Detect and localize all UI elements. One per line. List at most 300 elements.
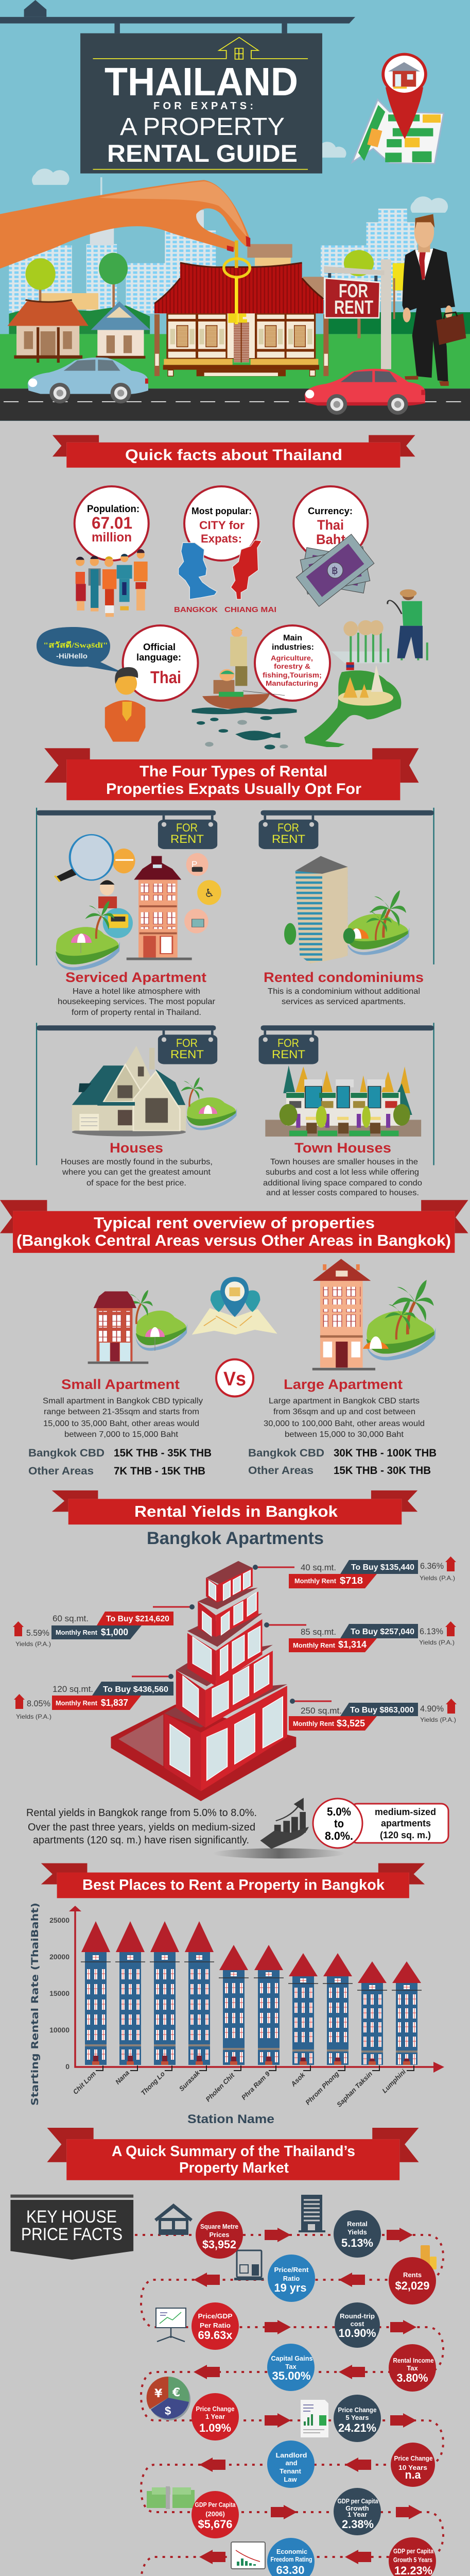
x axis title: Station Name xyxy=(187,2112,274,2126)
road xyxy=(0,388,470,421)
node: rental yields: Yields xyxy=(347,2228,367,2236)
node: rental yields: 5.13% xyxy=(341,2236,373,2249)
banner: quick summary: Property Market xyxy=(179,2160,289,2176)
illustration: small apartment building xyxy=(88,1290,187,1364)
fact: currency: Thai xyxy=(317,517,344,533)
callout: 60 sq.mt.: $1,000 xyxy=(101,1627,128,1637)
section: best places xyxy=(29,1863,444,2126)
heading and description: where you can get the greatest amount xyxy=(62,1168,211,1177)
fact: most popular city: BANGKOK xyxy=(174,605,218,614)
callout: 250 sq.mt.: To Buy $863,000 xyxy=(350,1706,414,1715)
station labels: Lumphini xyxy=(380,2067,407,2094)
bar: Phra Ram 9 xyxy=(254,1945,284,2065)
callout: 40 sq.mt.: $718 xyxy=(340,1575,363,1586)
icon: golden key xyxy=(224,241,250,324)
heading and description: services as serviced apartments. xyxy=(282,997,406,1006)
panel: houses xyxy=(37,1023,237,1188)
node: rents: $2,029 xyxy=(395,2279,429,2292)
callout: 60 sq.mt.: 5.59% xyxy=(26,1628,49,1638)
main Thai house xyxy=(154,263,328,376)
fact: main industries: forestry & xyxy=(274,662,310,670)
figure: man in orange shirt xyxy=(105,667,145,742)
node: rental income tax: 3.80% xyxy=(396,2371,428,2384)
callout: 5.0 to 8.0 percent: apartments xyxy=(381,1818,431,1828)
bar: Phrom Phong xyxy=(323,1953,353,2065)
icon: currency pie: € xyxy=(172,2386,180,2399)
small apartment details: Small Apartment xyxy=(61,1377,180,1392)
banner: quick summary xyxy=(47,2128,419,2180)
icon: map with location pin xyxy=(352,53,444,164)
heading and description: additional living space compared to condo xyxy=(263,1179,422,1188)
node: gdp growth 5 years: GDP per Capita xyxy=(393,2547,434,2555)
node: price change 1 year xyxy=(192,2393,239,2441)
node: capital gains tax: 35.00% xyxy=(272,2369,311,2382)
for rent hanger sign: RENT xyxy=(170,833,204,845)
station labels: Thong Lo xyxy=(140,2070,166,2097)
icon: banknotes: ฿ xyxy=(332,564,338,577)
heading and description: Houses are mostly found in the suburbs, xyxy=(61,1158,213,1166)
yields paragraph: apartments (120 sq. m.) have risen significantly. xyxy=(33,1835,249,1846)
hero illustration xyxy=(0,0,470,421)
panel: rented condominiums xyxy=(259,808,434,1006)
node: gdp per capita xyxy=(192,2491,239,2538)
for rent hanger sign xyxy=(259,808,434,964)
small apartment details: Bangkok CBD xyxy=(28,1447,105,1459)
node: rental income tax: Rental Income xyxy=(393,2357,433,2364)
node: price/rent ratio: Price/Rent xyxy=(274,2266,309,2274)
illustration: serviced apartment building and amenities: ♿ xyxy=(204,887,215,900)
node: price change 5 years xyxy=(334,2395,381,2442)
icon: banknotes xyxy=(296,534,374,606)
banner: typical rent overview: (Bangkok Central Areas versus Other Areas in Bangkok) xyxy=(16,1231,451,1249)
banner: best places: Best Places to Rent a Property in Bangkok xyxy=(82,1877,385,1893)
heading and description: of space for the best price. xyxy=(86,1179,186,1188)
callout: 250 sq.mt. xyxy=(289,1699,457,1731)
node: price change 1 year: 1.09% xyxy=(199,2421,231,2434)
node: price change 1 year: 1 Year xyxy=(205,2413,225,2420)
for rent hanger sign: FOR xyxy=(176,1037,198,1049)
chart: starting rental rate by station xyxy=(29,1903,444,2126)
node: price/rent ratio: Ratio xyxy=(283,2275,300,2282)
section: property market summary xyxy=(10,2128,457,2576)
callout: 250 sq.mt.: $3,525 xyxy=(337,1718,365,1728)
hand holding key xyxy=(0,180,250,324)
for rent hanger sign: RENT xyxy=(170,1048,204,1061)
fact: population: million xyxy=(92,530,132,545)
banner: four types xyxy=(44,748,419,800)
icon: house outline xyxy=(154,2204,193,2235)
node: round-trip cost xyxy=(335,2302,380,2348)
icon: office tower xyxy=(299,2195,325,2232)
fact: currency: Baht xyxy=(316,532,345,547)
node: gdp growth 1 year: 2.38% xyxy=(342,2518,374,2531)
banner: best places xyxy=(41,1863,425,1898)
versus badge: Vs xyxy=(223,1368,246,1390)
large apartment details: 30,000 to 100,000 Baht, other areas would xyxy=(264,1419,425,1428)
fact: main industries: Agriculture, xyxy=(271,654,313,662)
fact: official language: language: xyxy=(136,652,181,663)
heading and description: Town Houses xyxy=(294,1140,391,1156)
node: price change 10 years xyxy=(391,2443,435,2487)
small apartment details: 15,000 to 35,000 Baht, other areas would xyxy=(43,1419,199,1428)
icon: stacks of money xyxy=(147,2486,195,2509)
for rent hanger sign: FOR xyxy=(176,821,198,834)
fact: official language: Thai xyxy=(150,668,181,687)
callout: 85 sq.mt.: $1,314 xyxy=(338,1639,367,1650)
yields paragraph: Rental yields in Bangkok range from 5.0% to 8.0%. xyxy=(26,1807,257,1819)
flow arrows xyxy=(194,2228,422,2576)
speech bubble xyxy=(37,627,124,673)
yields paragraph xyxy=(26,1807,257,1846)
fact: most popular city: Most popular: xyxy=(192,506,252,516)
node: price change 5 years: 5 Years xyxy=(345,2414,369,2421)
for rent hanger sign xyxy=(259,1023,434,1165)
fact: population: Population: xyxy=(87,504,140,515)
station labels: Pholen Chit xyxy=(204,2071,236,2103)
small apartment details: range between 21-35sqm and starts from xyxy=(44,1408,199,1416)
large apartment details: from 36sqm and up and cost between xyxy=(273,1408,415,1416)
callout: 60 sq.mt.: 60 sq.mt. xyxy=(53,1614,89,1623)
banner: quick facts xyxy=(53,435,415,468)
icon: currency pie xyxy=(147,2377,190,2420)
callout: 120 sq.mt.: To Buy $436,560 xyxy=(103,1685,168,1694)
key house price facts label: KEY HOUSE xyxy=(26,2207,117,2227)
small apartment details: 7K THB - 15K THB xyxy=(114,1465,205,1477)
node: economic freedom rating xyxy=(267,2538,315,2576)
fact: population xyxy=(75,486,149,617)
node: capital gains tax: Capital Gains xyxy=(271,2354,313,2362)
callout: 40 sq.mt. xyxy=(253,1556,456,1588)
small apartment details xyxy=(28,1377,212,1477)
versus badge xyxy=(216,1359,253,1396)
node: gdp per capita: GDP Per Capita xyxy=(195,2501,236,2509)
callout: 120 sq.mt.: Monthly Rent xyxy=(56,1699,98,1707)
node: rents: Rents xyxy=(403,2271,422,2279)
heading and description: Have a hotel like atmosphere with xyxy=(73,987,200,996)
callout: 5.0 to 8.0 percent xyxy=(313,1799,448,1848)
speech bubble: "สวัสดี/Swạs̄dī" xyxy=(43,641,108,650)
node: price/rent ratio xyxy=(268,2255,315,2302)
callout: 250 sq.mt.: 4.90% xyxy=(420,1704,444,1714)
bar: Thong Lo xyxy=(150,1921,180,2065)
icon: gold coins xyxy=(421,2245,437,2269)
y axis labels: 10000 xyxy=(49,2026,69,2034)
large apartment details: 30K THB - 100K THB xyxy=(334,1447,437,1459)
key house price facts label: PRICE FACTS xyxy=(21,2225,123,2244)
node: landlord and tenant law: Tenant xyxy=(280,2467,301,2475)
callout: 5.0 to 8.0 percent: medium-sized xyxy=(375,1807,436,1817)
callout: 85 sq.mt.: Yields (P.A.) xyxy=(419,1639,455,1646)
illustration: serviced apartment building and amenities xyxy=(55,835,221,970)
node: gdp growth 1 year: GDP per Capita xyxy=(338,2497,378,2505)
bar: Chit Lom xyxy=(81,1921,111,2065)
callout: 60 sq.mt. xyxy=(13,1604,195,1648)
node: landlord and tenant law: Landlord xyxy=(276,2451,307,2459)
node: square metre prices xyxy=(196,2211,243,2259)
key house price facts label xyxy=(10,2195,133,2260)
heading and description xyxy=(263,1140,422,1197)
node: price/gdp per ratio: Price/GDP xyxy=(198,2312,233,2320)
fact: official language: Official xyxy=(143,642,176,652)
callout: 40 sq.mt.: Monthly Rent xyxy=(294,1577,337,1585)
for rent hanger sign: FOR xyxy=(277,1037,299,1049)
fact: main industries: fishing,Tourism; xyxy=(263,671,322,679)
node: rental yields xyxy=(334,2210,381,2258)
title xyxy=(105,60,298,167)
node: gdp growth 1 year xyxy=(334,2488,381,2535)
illustration: suburban house xyxy=(72,1046,237,1137)
callout: 120 sq.mt.: $1,837 xyxy=(101,1698,128,1708)
title: A PROPERTY xyxy=(120,113,285,141)
node: gdp growth 1 year: Growth xyxy=(345,2504,369,2512)
callout: 85 sq.mt.: Monthly Rent xyxy=(293,1641,336,1649)
node: price/gdp per ratio xyxy=(192,2302,239,2350)
icon: report document xyxy=(301,2400,328,2437)
heading and description: form of property rental in Thailand. xyxy=(72,1008,201,1017)
section: rental yields xyxy=(13,1490,457,1858)
node: gdp per capita: (2006) xyxy=(205,2510,225,2518)
station labels: Nana xyxy=(114,2069,131,2086)
node: price change 10 years: n.a xyxy=(405,2468,421,2481)
station labels: Surasak xyxy=(178,2069,202,2093)
banner: typical rent overview: Typical rent overview of properties xyxy=(94,1214,375,1232)
large apartment details: Large apartment in Bangkok CBD starts xyxy=(269,1397,420,1405)
station labels: Saphan Taksin xyxy=(335,2070,374,2109)
node: price change 10 years: 10 Years xyxy=(398,2464,427,2471)
node: gdp growth 1 year: 1 Year xyxy=(347,2511,367,2518)
node: economic freedom rating: Freedom Rating xyxy=(271,2555,312,2563)
callout: 5.0 to 8.0 percent: to xyxy=(334,1817,344,1830)
small apartment details: between 7,000 to 15,000 Baht xyxy=(64,1430,179,1439)
heading and description: housekeeping services. The most popular xyxy=(58,997,216,1006)
bar: Asok xyxy=(288,1953,318,2065)
y axis labels: 0 xyxy=(65,2062,69,2071)
icon: five people in Thai dress xyxy=(76,549,148,617)
heading and description xyxy=(58,970,216,1017)
node: price change 10 years: Price Change xyxy=(394,2454,432,2462)
bar: Lumphini xyxy=(392,1961,422,2065)
small apartment details: 15K THB - 35K THB xyxy=(114,1447,212,1459)
y axis title: Starting Rental Rate (ThaiBaht) xyxy=(29,1903,41,2106)
node: square metre prices: Square Metre xyxy=(200,2223,238,2230)
illustration: row of town houses xyxy=(265,1065,421,1137)
dotted flow path xyxy=(135,2235,443,2576)
panel: serviced apartment xyxy=(37,808,221,1017)
station labels: Chit Lom xyxy=(72,2070,97,2096)
icon: apartment block xyxy=(234,2250,264,2280)
fact: main industries: industries: xyxy=(272,643,314,652)
node: landlord and tenant law: and xyxy=(285,2459,298,2467)
large apartment details: Other Areas xyxy=(248,1465,314,1477)
callout: 85 sq.mt.: 6.13% xyxy=(420,1626,443,1636)
panel: town houses xyxy=(259,1023,434,1197)
for rent hanger sign xyxy=(37,1023,217,1165)
illustration: tourist, fisherman, boat and fish xyxy=(192,627,297,750)
node: price/gdp per ratio: Per Ratio xyxy=(200,2321,231,2329)
node: rental income tax: Tax xyxy=(407,2364,418,2372)
illustration: condo tower and palm garden xyxy=(284,856,409,963)
icon: presentation board xyxy=(156,2308,186,2342)
node: round-trip cost: 10.90% xyxy=(339,2327,376,2340)
heading and description: suburbs and cost a lot less while offering xyxy=(266,1168,419,1177)
heading and description: Houses xyxy=(110,1140,163,1156)
node: gdp per capita: $5,676 xyxy=(198,2518,233,2531)
callout: 60 sq.mt.: To Buy $214,620 xyxy=(106,1615,169,1623)
node: price/rent ratio: 19 yrs xyxy=(274,2281,307,2294)
bar: Nana xyxy=(115,1921,145,2065)
node: round-trip cost: Round-trip xyxy=(340,2312,375,2320)
icon: Bangkok and Chiang Mai province maps xyxy=(179,540,262,599)
section: four rental types xyxy=(37,748,434,1197)
heading and description xyxy=(264,970,424,1006)
banner: rental yields xyxy=(52,1490,417,1524)
node: price change 5 years: 24.21% xyxy=(338,2421,376,2434)
callout: 5.0 to 8.0 percent: (120 sq. m.) xyxy=(380,1830,431,1840)
icon: hand holding rising bar chart xyxy=(213,1798,345,1858)
banner: typical rent overview xyxy=(0,1200,468,1253)
fact: currency: Currency: xyxy=(308,506,353,516)
bar: Surasak xyxy=(184,1921,214,2065)
yields paragraph: Over the past three years, yields on medium-sized xyxy=(28,1822,255,1833)
callout: 40 sq.mt.: To Buy $135,440 xyxy=(351,1563,414,1572)
businessman with briefcase xyxy=(402,214,466,386)
fact: main industries: Manufacturing xyxy=(266,679,318,687)
node: rental income tax xyxy=(389,2344,436,2392)
node: price change 5 years: Price Change xyxy=(338,2406,377,2414)
large apartment details: 15K THB - 30K THB xyxy=(334,1465,431,1477)
callout: 60 sq.mt.: Monthly Rent xyxy=(56,1629,98,1636)
node: gdp growth 5 years: Growth 5 Years xyxy=(393,2556,432,2564)
section: typical rent overview xyxy=(0,1200,468,1477)
icon: currency pie: $ xyxy=(165,2404,171,2417)
background city and sign beam xyxy=(0,0,470,388)
node: price change 1 year: Price Change xyxy=(196,2405,235,2413)
title: RENTAL GUIDE xyxy=(107,140,298,167)
fact: population: 67.01 xyxy=(92,514,132,532)
for rent sign xyxy=(324,259,391,369)
for rent sign: FOR xyxy=(339,280,368,301)
callout: 250 sq.mt.: Monthly Rent xyxy=(293,1720,335,1727)
node: square metre prices: Prices xyxy=(209,2231,230,2239)
large apartment details: Bangkok CBD xyxy=(248,1447,324,1459)
small apartment details: Other Areas xyxy=(28,1465,94,1477)
for rent hanger sign: FOR xyxy=(277,821,299,834)
speech bubble: -Hi/Hello xyxy=(56,652,88,660)
node: round-trip cost: cost xyxy=(351,2320,364,2328)
y axis labels xyxy=(49,1916,69,2071)
y axis labels: 15000 xyxy=(49,1989,69,1997)
for rent sign: RENT xyxy=(334,297,373,318)
banner: four types: Properties Expats Usually Opt For xyxy=(106,781,361,798)
illustration: farmer, rice and Thailand map xyxy=(304,589,427,747)
banner: quick summary: A Quick Summary of the Thailand’s xyxy=(112,2143,355,2160)
fact: most popular city: CITY for xyxy=(199,519,245,532)
callout: 85 sq.mt.: 85 sq.mt. xyxy=(301,1627,336,1637)
fact: most popular city: CHIANG MAI xyxy=(224,605,276,614)
node: rental yields: Rental xyxy=(347,2220,368,2228)
callout: 60 sq.mt.: Yields (P.A.) xyxy=(15,1640,51,1648)
banner: four types: The Four Types of Rental xyxy=(140,763,327,780)
station labels: Phra Ram 9 xyxy=(240,2070,272,2102)
heading and description: Town houses are smaller houses in the xyxy=(270,1158,418,1166)
heading and description xyxy=(61,1140,213,1188)
heading and description: Rented condominiums xyxy=(264,970,424,985)
fact: official language xyxy=(37,625,198,742)
callout: 250 sq.mt.: Yields (P.A.) xyxy=(420,1716,456,1723)
callout: 85 sq.mt.: To Buy $257,040 xyxy=(351,1628,414,1636)
node: landlord and tenant law xyxy=(267,2441,315,2488)
blue car xyxy=(28,358,148,403)
title: FOR EXPATS: xyxy=(153,100,253,112)
chart: isometric apartment tower xyxy=(111,1561,296,1801)
for rent hanger sign: RENT xyxy=(272,1048,305,1061)
subheading: Bangkok Apartments xyxy=(147,1529,324,1548)
chart axes xyxy=(69,1906,444,2073)
node: square metre prices: $3,952 xyxy=(202,2238,236,2251)
heading and description: This is a condominium without additional xyxy=(268,987,420,996)
bar: Saphan Taksin xyxy=(357,1961,387,2065)
callout: 5.0 to 8.0 percent: 5.0% xyxy=(327,1805,351,1818)
callout: 120 sq.mt.: 120 sq.mt. xyxy=(53,1684,93,1694)
bar: Pholen Chit xyxy=(219,1945,249,2065)
node: capital gains tax xyxy=(267,2344,315,2391)
callout: 120 sq.mt.: 8.05% xyxy=(27,1699,50,1708)
station labels: Phrom Phong xyxy=(304,2070,340,2106)
callout: 120 sq.mt.: Yields (P.A.) xyxy=(16,1713,51,1720)
large apartment details: between 15,000 to 30,000 Baht xyxy=(285,1430,404,1439)
station labels: Asok xyxy=(289,2071,307,2088)
callout: 5.0 to 8.0 percent: 8.0%. xyxy=(325,1829,353,1842)
banner: quick facts: Quick facts about Thailand xyxy=(125,447,342,464)
fact: currency xyxy=(293,486,374,606)
for rent hanger sign: RENT xyxy=(272,833,305,845)
icon: map with three pins xyxy=(192,1277,277,1335)
callout: 40 sq.mt.: Yields (P.A.) xyxy=(420,1574,455,1582)
node: price/gdp per ratio: 69.63x xyxy=(198,2329,233,2342)
node: gdp growth 5 years xyxy=(389,2537,436,2576)
y axis labels: 20000 xyxy=(49,1953,69,1961)
icon: currency pie: ¥ xyxy=(154,2387,163,2400)
node: rents xyxy=(389,2257,436,2304)
for rent hanger sign xyxy=(37,808,217,965)
heading and description: and at lesser costs compared to houses. xyxy=(266,1189,419,1197)
section: quick facts xyxy=(37,435,427,750)
banner: rental yields: Rental Yields in Bangkok xyxy=(134,1502,338,1520)
illustration: large apartment building xyxy=(312,1259,436,1370)
heading and description: Serviced Apartment xyxy=(65,970,206,985)
callout: 40 sq.mt.: 6.36% xyxy=(420,1561,444,1571)
callout: 85 sq.mt. xyxy=(264,1621,456,1652)
icon: line chart board xyxy=(231,2542,265,2569)
fact: most popular city xyxy=(174,486,276,614)
callout: 120 sq.mt. xyxy=(14,1674,173,1720)
large apartment details xyxy=(248,1377,437,1477)
callout: 250 sq.mt.: 250 sq.mt. xyxy=(301,1706,342,1716)
fact: main industries xyxy=(192,589,427,750)
node: economic freedom rating: Economic xyxy=(276,2548,307,2555)
illustration: serviced apartment building and amenities: P xyxy=(192,859,197,869)
node: capital gains tax: Tax xyxy=(285,2363,297,2370)
red car xyxy=(305,369,425,415)
title: THAILAND xyxy=(105,60,298,104)
large apartment details: Large Apartment xyxy=(284,1377,403,1392)
fact: main industries: Main xyxy=(283,634,302,642)
callout: 40 sq.mt.: 40 sq.mt. xyxy=(301,1563,336,1572)
fact: most popular city: Expats: xyxy=(201,532,242,545)
small apartment details: Small apartment in Bangkok CBD typically xyxy=(43,1397,203,1405)
node: landlord and tenant law: Law xyxy=(284,2476,298,2483)
y axis labels: 25000 xyxy=(49,1916,69,1924)
